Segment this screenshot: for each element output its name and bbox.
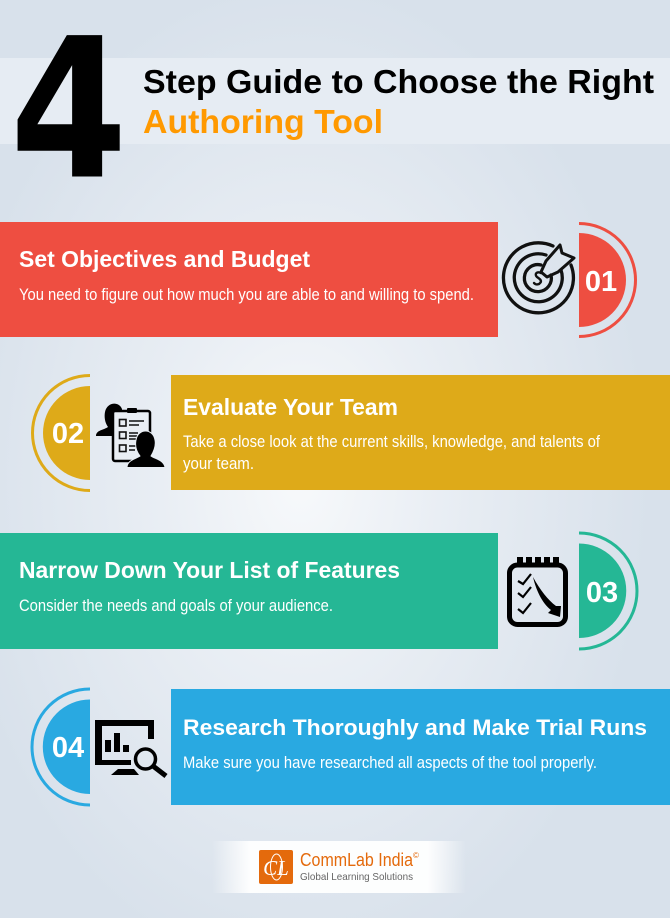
logo text: © xyxy=(413,851,419,860)
step 3 text: Consider the needs and goals of your audience. xyxy=(19,597,333,615)
step 3 band xyxy=(0,533,498,649)
title xyxy=(143,63,654,140)
step 1 band xyxy=(0,222,498,337)
panel: step 1 xyxy=(0,222,636,337)
panel: step 2 xyxy=(32,375,670,490)
step 1 text: You need to figure out how much you are able to and willing to spend. xyxy=(19,286,474,304)
logo text: Global Learning Solutions xyxy=(300,871,413,883)
icon: target with arrow xyxy=(503,243,574,313)
logo panel xyxy=(212,841,466,893)
icon: monitor with magnifier xyxy=(95,720,166,776)
step 1 number badge xyxy=(579,224,636,336)
step 2 number badge xyxy=(32,376,90,490)
step 2 number badge: 02 xyxy=(52,418,84,450)
icon: checklist calendar with arrow xyxy=(510,557,566,624)
logo text xyxy=(300,850,419,883)
step 4 band xyxy=(171,689,670,805)
step 2 band xyxy=(171,375,670,490)
logo mark: CL xyxy=(263,856,289,880)
title: Authoring Tool xyxy=(143,103,383,140)
big numeral 4: 4 xyxy=(10,0,127,222)
logo text: CommLab India xyxy=(300,850,414,870)
panel: step 4 xyxy=(32,689,670,805)
step 1 number badge: 01 xyxy=(585,266,617,298)
step 3 number badge: 03 xyxy=(586,577,618,609)
step 3 number badge xyxy=(579,533,637,649)
logo mark xyxy=(259,850,293,884)
step 4 heading: Research Thoroughly and Make Trial Runs xyxy=(183,715,647,740)
step 2 heading: Evaluate Your Team xyxy=(183,394,398,420)
step 2 text: your team. xyxy=(183,455,254,473)
step 2 text: Take a close look at the current skills, knowledge, and talents of xyxy=(183,433,600,451)
title band xyxy=(0,58,670,144)
step 4 number badge: 04 xyxy=(52,732,84,764)
step 4 text: Make sure you have researched all aspects of the tool properly. xyxy=(183,754,597,772)
panel: step 3 xyxy=(0,533,637,649)
step 4 number badge xyxy=(32,689,90,805)
step 3 heading: Narrow Down Your List of Features xyxy=(19,557,400,583)
icon: team checklist xyxy=(96,404,165,468)
title: Step Guide to Choose the Right xyxy=(143,63,654,100)
step 2 text xyxy=(183,433,600,473)
step 1 heading: Set Objectives and Budget xyxy=(19,246,310,272)
